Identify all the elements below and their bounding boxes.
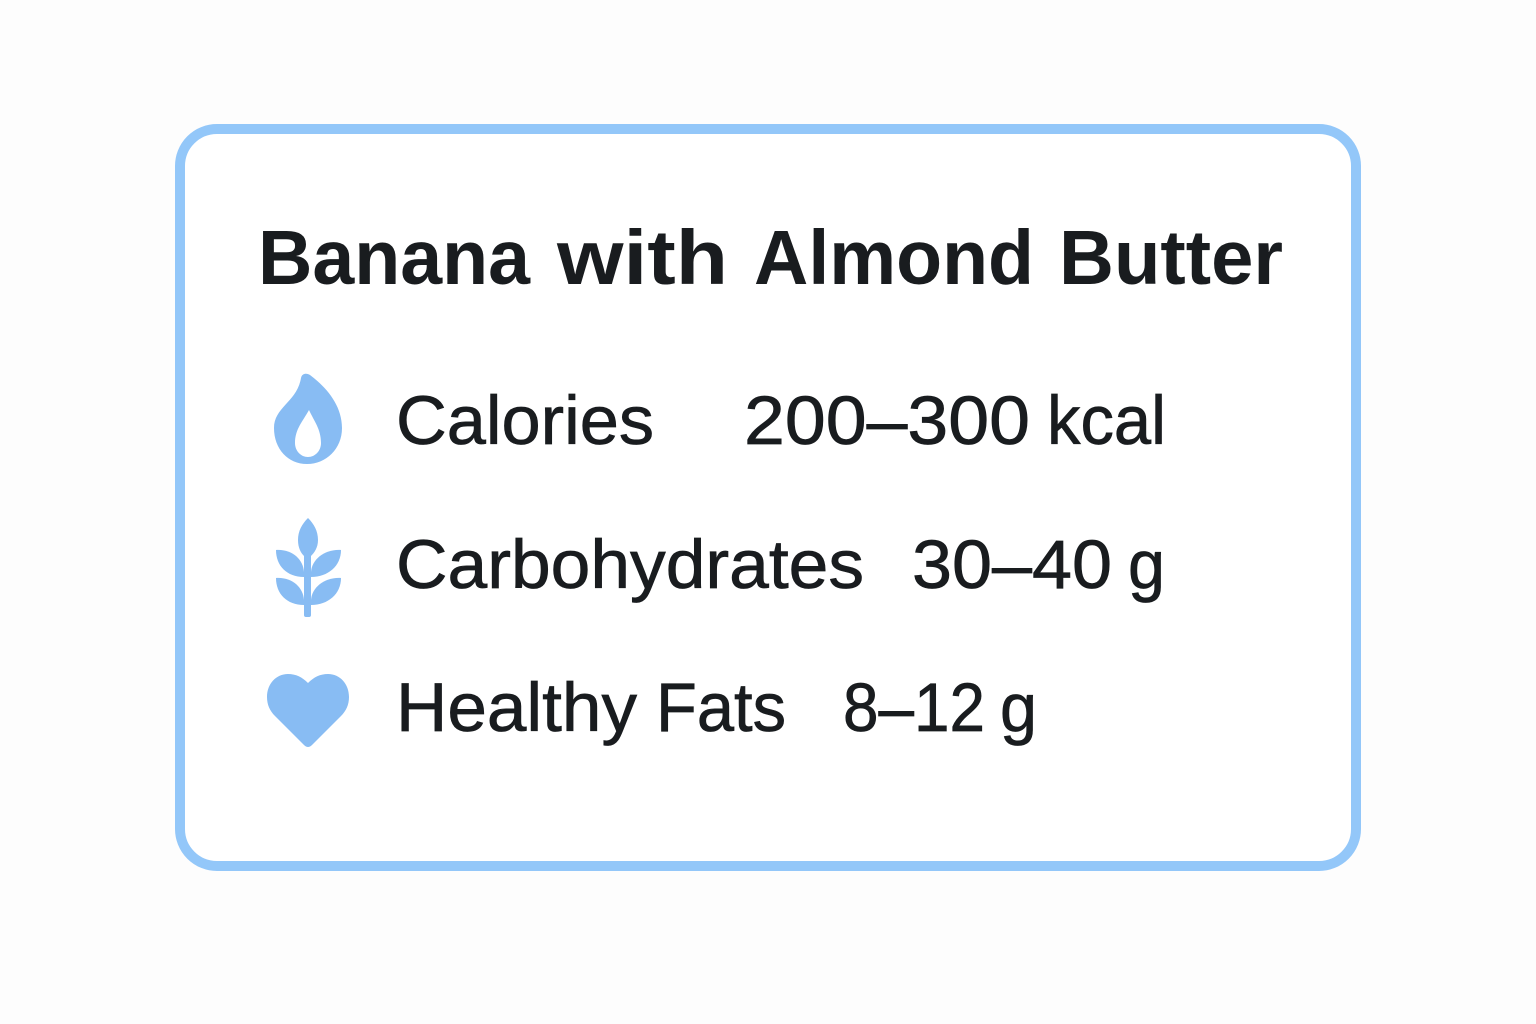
row: carbohydrates: [276, 518, 1165, 617]
row: healthy fats: [267, 669, 1037, 747]
value: healthy fats: g: [1000, 669, 1037, 746]
icon: sprig: [276, 518, 341, 617]
title: Almond: [754, 215, 1034, 301]
value: healthy fats: 8–12: [843, 669, 985, 746]
label: healthy fats: Fats: [656, 669, 786, 746]
label: calories: Calories: [396, 382, 654, 459]
value: calories: 200–300: [744, 382, 1030, 459]
value: carbohydrates: 30–40: [912, 526, 1112, 603]
value: carbohydrates: g: [1128, 526, 1165, 603]
title: Butter: [1059, 215, 1283, 301]
label: carbohydrates: Carbohydrates: [396, 526, 864, 603]
icon: flame drop: [274, 374, 342, 464]
panel: nutrition card: [180, 129, 1356, 866]
value: calories: kcal: [1047, 382, 1166, 459]
row: calories: [274, 374, 1166, 464]
label: healthy fats: Healthy: [396, 669, 638, 746]
title: Banana: [258, 215, 531, 301]
title: with: [556, 215, 728, 301]
icon: heart: [267, 674, 349, 747]
